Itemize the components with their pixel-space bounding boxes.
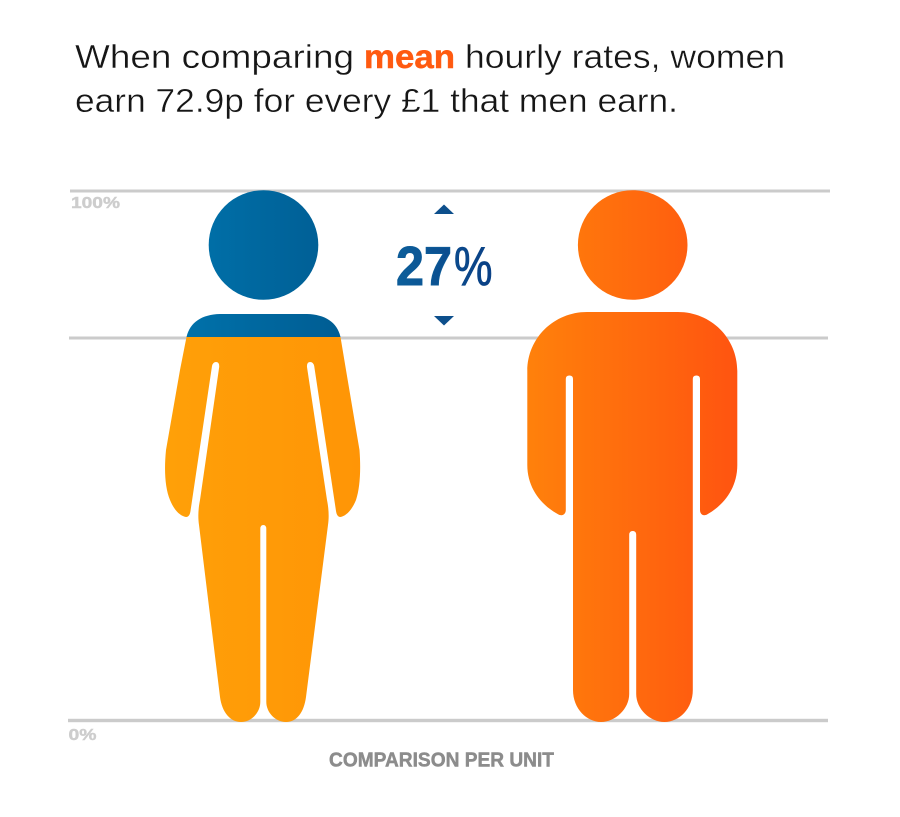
title: hourly rates, women [465,39,785,76]
chart grid lines [68,190,830,722]
woman figure [165,190,360,722]
title: When comparing [75,39,354,76]
gap indicator [396,204,492,326]
man body [527,312,737,722]
arrow down [434,316,454,326]
woman shoulders: gap portion [186,314,340,337]
woman head [209,190,318,300]
axis label: 100%: 100% [71,195,120,212]
axis caption: COMPARISON PER UNIT [329,748,554,772]
woman body: filled portion [165,337,360,722]
title: earn 72.9p for every £1 that men earn. [75,83,678,120]
title: mean [364,39,455,76]
axis label: 0%: 0% [68,727,97,744]
title [75,39,785,120]
man figure [527,190,737,722]
arrow up [434,204,454,214]
gap percentage: % [454,235,492,297]
man head [578,190,688,300]
gap percentage: 27 [396,235,452,297]
